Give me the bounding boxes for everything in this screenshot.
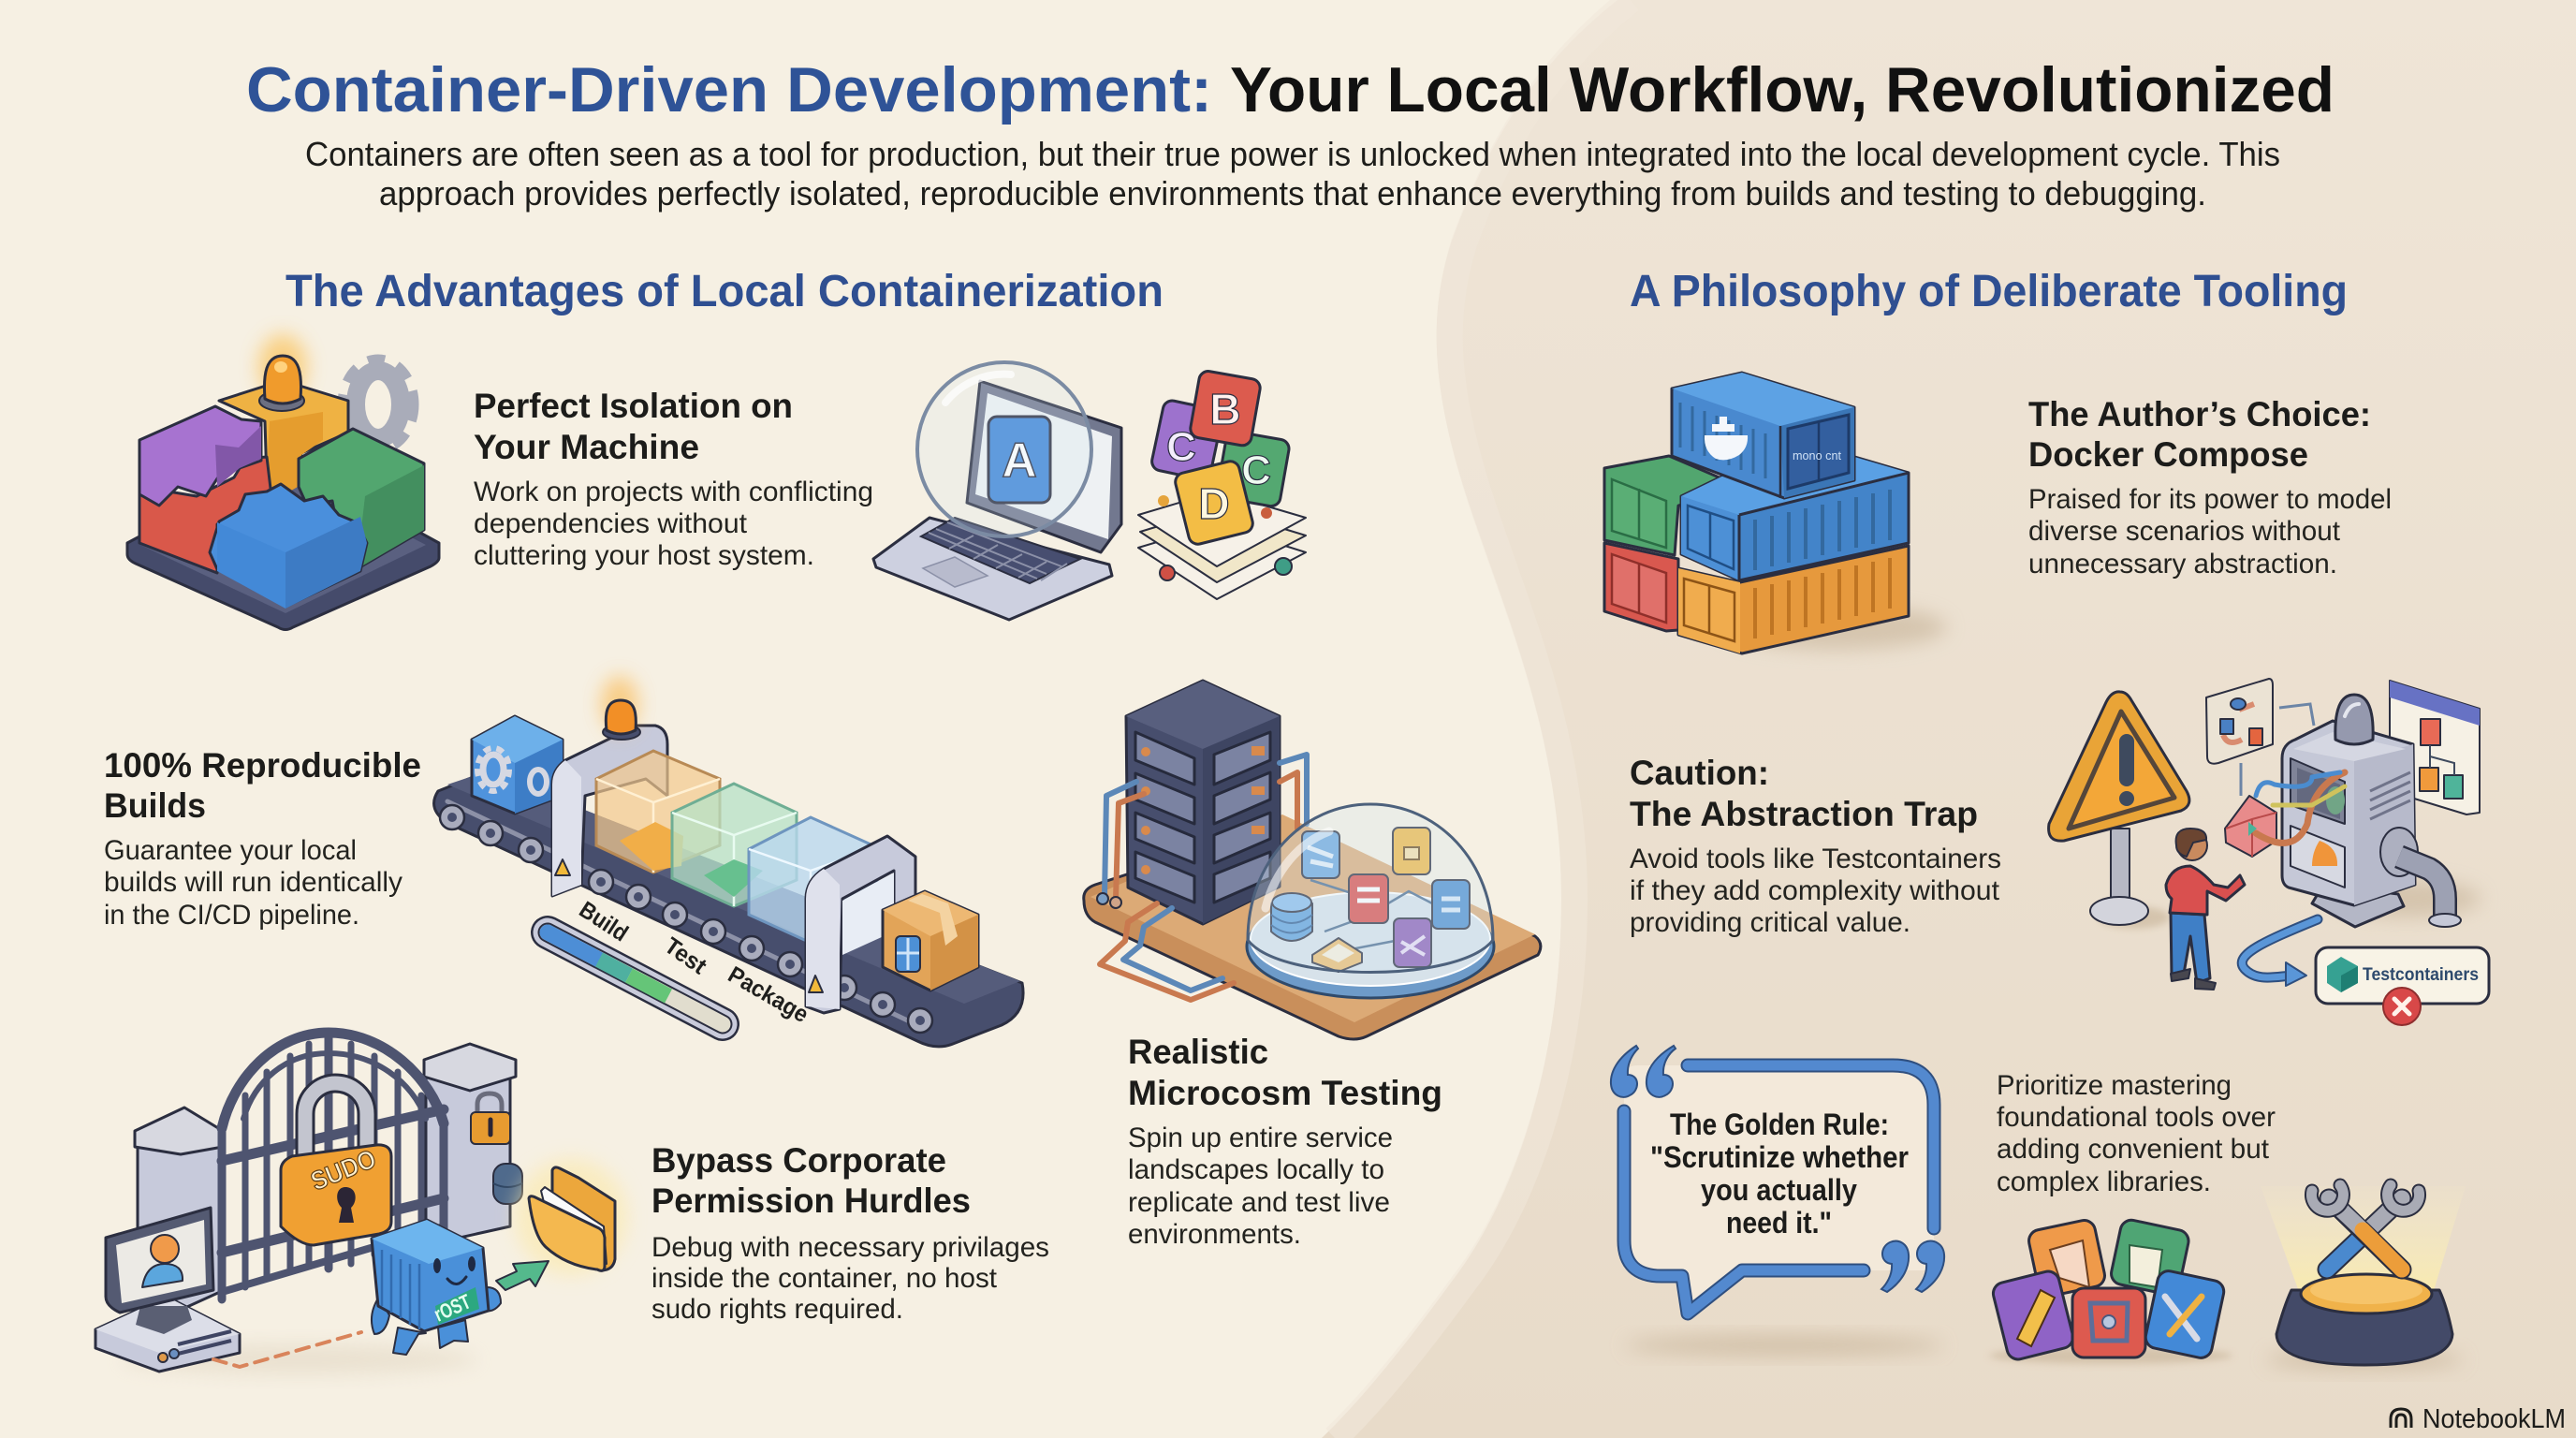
diagram panel xyxy=(2206,679,2314,796)
icon: dependency cards xyxy=(1138,370,1306,599)
text: perfect isolation: cluttering your host system. xyxy=(474,540,814,571)
icon: input cube with gears xyxy=(472,716,563,814)
callout: golden rule speech bubble: The Golden Rule: xyxy=(1670,1108,1889,1141)
text: abstraction trap xyxy=(1630,754,2001,938)
text: permission hurdles: Bypass Corporate xyxy=(651,1141,946,1180)
opening quote xyxy=(1611,1046,1676,1097)
text: permission hurdles: inside the container, no host xyxy=(651,1263,998,1294)
text: reproducible builds xyxy=(104,746,421,931)
icon: over-complex machine xyxy=(2206,679,2481,927)
glowing folder xyxy=(515,1159,627,1275)
icon: dependency cards: B xyxy=(1209,385,1241,433)
glass dome xyxy=(1247,804,1494,998)
text: prioritize foundations: Prioritize mastering xyxy=(1997,1070,2232,1101)
icon: cluster of library tiles xyxy=(1989,1218,2232,1364)
text: perfect isolation: Your Machine xyxy=(474,428,699,466)
wrench: orange and grey xyxy=(2311,1185,2402,1269)
data cylinder xyxy=(493,1164,522,1204)
icon: wrenches on glowing pedestal xyxy=(2261,1185,2466,1371)
icon: shipped package xyxy=(883,891,978,990)
icon: dependency cards: C xyxy=(1166,424,1196,470)
text: perfect isolation xyxy=(474,387,873,571)
text: perfect isolation: Work on projects with conflicting xyxy=(474,477,873,507)
callout: golden rule speech bubble xyxy=(1611,1046,1944,1356)
text: author's choice xyxy=(2028,395,2392,580)
text: reproducible builds: 100% Reproducible xyxy=(104,746,421,785)
container mascot: rOST xyxy=(431,1289,475,1327)
icon: puzzle blocks on tray xyxy=(127,334,439,629)
glass stage: build xyxy=(596,751,720,873)
text: perfect isolation: dependencies without xyxy=(474,508,748,539)
progress bar xyxy=(548,932,723,1024)
cables xyxy=(1100,755,1307,1000)
text: permission hurdles: sudo rights required. xyxy=(651,1294,903,1325)
callout: testcontainers rejected xyxy=(2316,947,2489,1025)
glass stage: test xyxy=(672,784,797,906)
right pillar xyxy=(424,1044,516,1245)
icon: warning sign xyxy=(2049,692,2189,929)
text: perfect isolation: Perfect Isolation on xyxy=(474,387,793,425)
text: author's choice: Praised for its power to model xyxy=(2028,484,2392,515)
icon: server rack and glass dome microcosm xyxy=(1084,681,1541,1039)
text: reproducible builds: in the CI/CD pipeline. xyxy=(104,900,359,931)
text: permission hurdles: Permission Hurdles xyxy=(651,1181,971,1220)
callout: golden rule speech bubble: you actually xyxy=(1701,1173,1857,1207)
intro text: Containers are often seen as a tool for production, but their true power is unlocked when integrated into the local development cycle. This xyxy=(305,135,2280,173)
server rack xyxy=(1126,681,1280,924)
monitor and desktop xyxy=(95,1208,240,1372)
icon: dependency cards: D xyxy=(1198,479,1230,528)
text: microcosm testing: environments. xyxy=(1128,1219,1301,1250)
icon: locked sudo gate with container mascot xyxy=(95,1033,627,1374)
padlock xyxy=(281,1083,391,1245)
icon: laptop in glass bubble: A xyxy=(1002,433,1037,488)
text: microcosm testing: Realistic xyxy=(1128,1033,1268,1071)
text: microcosm testing: replicate and test live xyxy=(1128,1187,1390,1218)
text: microcosm testing xyxy=(1128,1033,1442,1250)
text: prioritize foundations: foundational tools over xyxy=(1997,1102,2276,1133)
wires and red cube xyxy=(2225,772,2345,857)
text: author's choice: diverse scenarios without xyxy=(2028,516,2341,547)
title: Your Local Workflow, Revolutionized xyxy=(1230,54,2334,125)
callout: golden rule speech bubble: "Scrutinize whether xyxy=(1650,1140,1909,1174)
intro text xyxy=(305,135,2280,213)
middle blue container xyxy=(1681,440,1909,580)
stage labels xyxy=(575,897,812,1028)
icon: dependency cards: C xyxy=(1241,448,1271,493)
text: author's choice: The Author’s Choice: xyxy=(2028,395,2371,433)
title xyxy=(246,54,2334,125)
callout: testcontainers rejected: Testcontainers xyxy=(2363,964,2479,985)
text: author's choice: unnecessary abstraction. xyxy=(2028,549,2337,580)
text: prioritize foundations: adding convenient but xyxy=(1997,1134,2270,1165)
green container xyxy=(1604,456,1741,555)
callout: golden rule speech bubble: need it." xyxy=(1726,1206,1832,1240)
stage labels: Test xyxy=(660,932,711,980)
heading: advantages: The Advantages of Local Containerization xyxy=(285,267,1164,316)
text: prioritize foundations xyxy=(1997,1070,2276,1197)
text: permission hurdles xyxy=(651,1141,1049,1325)
text: author's choice: Docker Compose xyxy=(2028,435,2308,474)
logo: NotebookLM: NotebookLM xyxy=(2422,1404,2566,1434)
container mascot xyxy=(372,1220,501,1355)
icon: build conveyor belt xyxy=(434,676,1023,1047)
workflow panel xyxy=(2390,681,2480,814)
stage labels: Package xyxy=(724,961,812,1028)
icon: person xyxy=(2166,829,2245,990)
red container xyxy=(1604,543,1678,631)
glass stage: package xyxy=(749,817,877,943)
title: Container-Driven Development: xyxy=(246,54,1212,125)
stage labels: Build xyxy=(575,897,633,947)
orange container xyxy=(1678,546,1909,653)
text: microcosm testing: Spin up entire service xyxy=(1128,1123,1393,1153)
text: abstraction trap: if they add complexity without xyxy=(1630,875,2000,906)
small padlock on pillar xyxy=(471,1093,510,1144)
closing quote xyxy=(1881,1241,1944,1292)
text: microcosm testing: landscapes locally to xyxy=(1128,1154,1384,1185)
text: microcosm testing: Microcosm Testing xyxy=(1128,1074,1442,1112)
text: reproducible builds: Builds xyxy=(104,786,206,825)
left pillar xyxy=(135,1108,223,1329)
icon: stacked shipping containers xyxy=(1604,373,1947,653)
text: abstraction trap: providing critical value. xyxy=(1630,907,1910,938)
text: permission hurdles: Debug with necessary privilages xyxy=(651,1232,1049,1263)
text: abstraction trap: Avoid tools like Testcontainers xyxy=(1630,844,2001,874)
top container with whale logo xyxy=(1672,373,1854,498)
arrow: machine to testcontainers xyxy=(2242,919,2318,986)
top container with whale logo: mono cnt xyxy=(1793,448,1841,462)
iron gate xyxy=(222,1033,444,1299)
wrench: blue and grey xyxy=(2327,1185,2420,1269)
text: reproducible builds: Guarantee your local xyxy=(104,835,357,866)
icon: laptop in glass bubble xyxy=(873,362,1121,620)
heading: philosophy: A Philosophy of Deliberate Tooling xyxy=(1630,267,2348,316)
padlock: SUDO xyxy=(307,1144,380,1196)
text: reproducible builds: builds will run identically xyxy=(104,867,402,898)
text: abstraction trap: The Abstraction Trap xyxy=(1630,795,1978,833)
intro text: approach provides perfectly isolated, reproducible environments that enhance everything from builds and testing to debugging. xyxy=(379,174,2206,213)
text: abstraction trap: Caution: xyxy=(1630,754,1769,792)
text: prioritize foundations: complex libraries. xyxy=(1997,1167,2211,1197)
